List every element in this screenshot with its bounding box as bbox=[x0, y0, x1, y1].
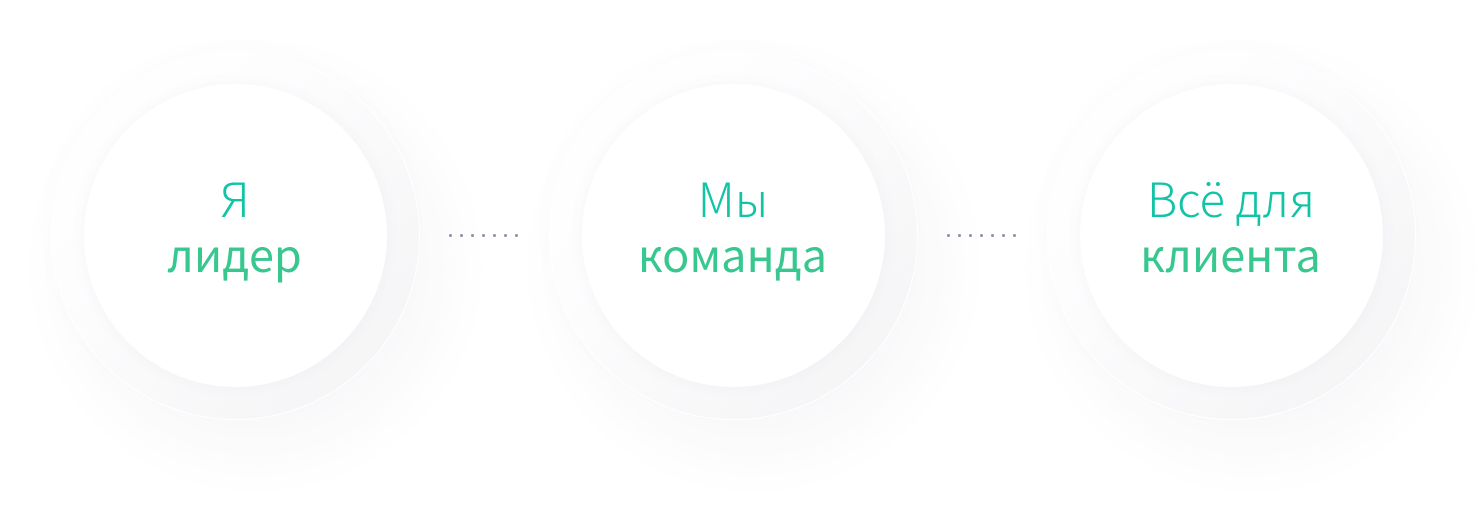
panel: client circle bbox=[1123, 125, 1414, 418]
outer ring bbox=[1047, 51, 1416, 420]
inner white disc bbox=[84, 84, 387, 387]
outer ring bbox=[549, 51, 918, 420]
connector dots 2 bbox=[947, 234, 1016, 237]
text: клиента: клиента bbox=[1140, 220, 1321, 285]
outer ring bbox=[51, 51, 420, 420]
panel: leader circle bbox=[127, 125, 418, 418]
text: лидер: лидер bbox=[167, 220, 302, 285]
panel: team circle bbox=[625, 125, 916, 418]
text: Я: Я bbox=[220, 162, 250, 231]
inner white disc bbox=[582, 84, 885, 387]
inner white disc bbox=[1080, 84, 1383, 387]
text: Всё для: Всё для bbox=[1147, 162, 1315, 231]
text: Мы: Мы bbox=[698, 162, 768, 231]
text: команда: команда bbox=[638, 220, 827, 285]
connector dots 1 bbox=[449, 234, 518, 237]
